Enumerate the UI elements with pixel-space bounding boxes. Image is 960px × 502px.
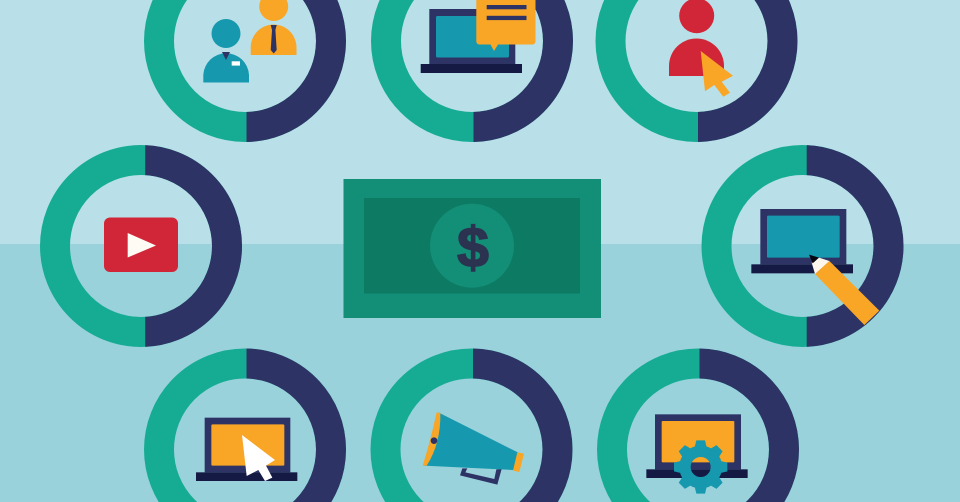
dollar bill: [344, 179, 601, 318]
icon: laptop with cursor: [196, 418, 297, 481]
ring: middle left: [55, 160, 227, 332]
ring: bottom left: [159, 364, 331, 502]
icon: laptop with pencil: [751, 209, 879, 325]
ring: bottom center: [386, 364, 558, 502]
icon: laptop with gear: [646, 414, 748, 494]
icon: laptop with speech bubble: [421, 0, 536, 73]
ring: top left: [159, 0, 331, 127]
dollar bill: $: [457, 216, 489, 280]
icon: megaphone: [423, 412, 524, 485]
icon: two business people: [203, 0, 296, 82]
ring: top center: [386, 0, 558, 127]
ring: bottom right: [612, 364, 784, 502]
ring: top right: [610, 0, 782, 127]
icon: person with cursor: [669, 0, 733, 97]
ring: middle right: [716, 160, 888, 332]
icon: video play button: [104, 218, 178, 272]
